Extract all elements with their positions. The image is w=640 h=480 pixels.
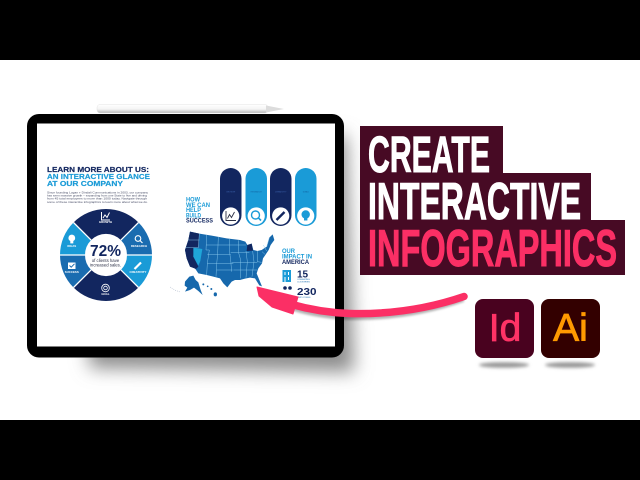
heading: our impact in america: OUR: [282, 248, 295, 255]
map: west coast states: [185, 232, 199, 269]
segment labels: RESEARCH: [131, 244, 147, 248]
pill: creativity: CREATIVITY: [275, 190, 287, 194]
pill: growth: [220, 168, 242, 226]
stat: 230 employees: EMPLOYEES: [297, 297, 311, 299]
arrow shaft: [290, 296, 464, 314]
icon: goal target: [102, 284, 109, 292]
icon: InDesign: [475, 299, 534, 358]
stat: 15 offices: OPERATING: [297, 278, 310, 281]
map: Aleutian trail: [170, 287, 180, 292]
donut centre stat: 72%: [90, 243, 121, 260]
pill: research: RESEARCH: [251, 190, 262, 194]
icon: research magnifier: [135, 236, 142, 243]
donut centre stat: [90, 243, 121, 268]
segment labels: GOAL: [101, 292, 110, 296]
donut centre stat: of clients have: [92, 258, 120, 263]
heading: learn more: AN INTERACTIVE GLANCE: [47, 172, 150, 181]
icon: growth chart: [102, 212, 110, 220]
US map: [170, 232, 274, 296]
heading: learn more: LEARN MORE ABOUT US:: [47, 165, 149, 174]
icon: creativity pencil: [134, 262, 141, 269]
heading: how we can help build success: SUCCESS: [186, 218, 213, 224]
pill: creativity: [270, 168, 292, 226]
heading: our impact in america: IMPACT IN: [282, 254, 312, 260]
title block: [360, 126, 625, 278]
heading: learn more: [47, 165, 150, 188]
segment labels: [65, 220, 147, 296]
icon: success check: [68, 262, 76, 269]
map: contiguous states: [185, 232, 274, 287]
heading: our impact in america: [282, 248, 312, 266]
segment labels: GROWTH: [99, 220, 112, 224]
segment labels: SUCCESS: [65, 270, 79, 274]
segment: success: [60, 255, 91, 288]
segment: growth: [74, 209, 138, 240]
intro paragraph: [47, 190, 148, 204]
segment: research: [121, 222, 152, 255]
segment labels: IDEAS: [67, 244, 76, 248]
segment: ideas: [60, 222, 91, 255]
heading: how we can help build success: HOW: [186, 196, 200, 204]
pill: growth: GROWTH: [226, 192, 236, 194]
arrow head: [257, 287, 298, 314]
pill: research: [246, 168, 267, 226]
top letterbox bar: [0, 0, 640, 60]
donut centre stat: increased sales.: [90, 262, 121, 268]
heading: our impact in america: AMERICA: [282, 259, 309, 266]
stat: 15 offices: 15: [297, 270, 309, 280]
heading: how we can help build success: WE CAN: [186, 202, 210, 209]
pill: ideas: IDEAS: [303, 190, 309, 194]
tablet frame: [27, 114, 344, 358]
heading: how we can help build success: HELP: [186, 207, 201, 214]
icon shadow: InDesign: [479, 362, 529, 368]
pink arrow: [257, 287, 464, 317]
heading: how we can help build success: BUILD: [186, 212, 201, 219]
map: Alaska: [185, 276, 203, 295]
arrow shadow: [294, 298, 463, 317]
pill: ideas: [295, 168, 316, 226]
intro paragraph: some of these interactive infographics to learn more about what we do.: [47, 200, 148, 204]
tablet screen: [37, 124, 335, 346]
map: Hawaii islands: [202, 283, 217, 296]
icon shadow: Illustrator: [545, 362, 595, 368]
stat: 230 employees: 230: [297, 287, 317, 298]
intro paragraph: from 45 total employees to more than 1000 today. Navigate through: [47, 196, 147, 200]
title line: create: CREATE: [368, 126, 490, 183]
segment: creativity: [121, 255, 152, 288]
donut chart: [59, 209, 153, 301]
icon: building: [282, 270, 291, 282]
icon: Illustrator: Ai: [553, 307, 588, 350]
map: Nevada: [193, 248, 202, 266]
map: state borders: [186, 234, 269, 278]
segment labels: CREATIVITY: [130, 270, 147, 274]
heading: how we can help build success: [186, 196, 213, 224]
icon: InDesign: Id: [489, 307, 521, 350]
tablet shadow: [70, 135, 354, 372]
icon: employees: [283, 286, 292, 290]
heading: learn more: AT OUR COMPANY: [47, 179, 123, 188]
map: Michigan: [247, 244, 253, 251]
intro paragraph: Since founding Logan + Dindali Communications in 2003, our company: [47, 190, 148, 194]
stat: 15 offices: COUNTRIES: [297, 282, 310, 284]
segment: goal: [74, 270, 138, 301]
stylus pencil: [97, 104, 284, 113]
icon: Illustrator: [541, 299, 600, 358]
title background: [360, 126, 625, 275]
stat: 15 offices: [282, 270, 310, 284]
icon: ideas bulb: [68, 235, 75, 243]
intro paragraph: has seen massive growth – expanding from one State to five and driving: [47, 194, 147, 198]
bottom letterbox bar: [0, 420, 640, 480]
